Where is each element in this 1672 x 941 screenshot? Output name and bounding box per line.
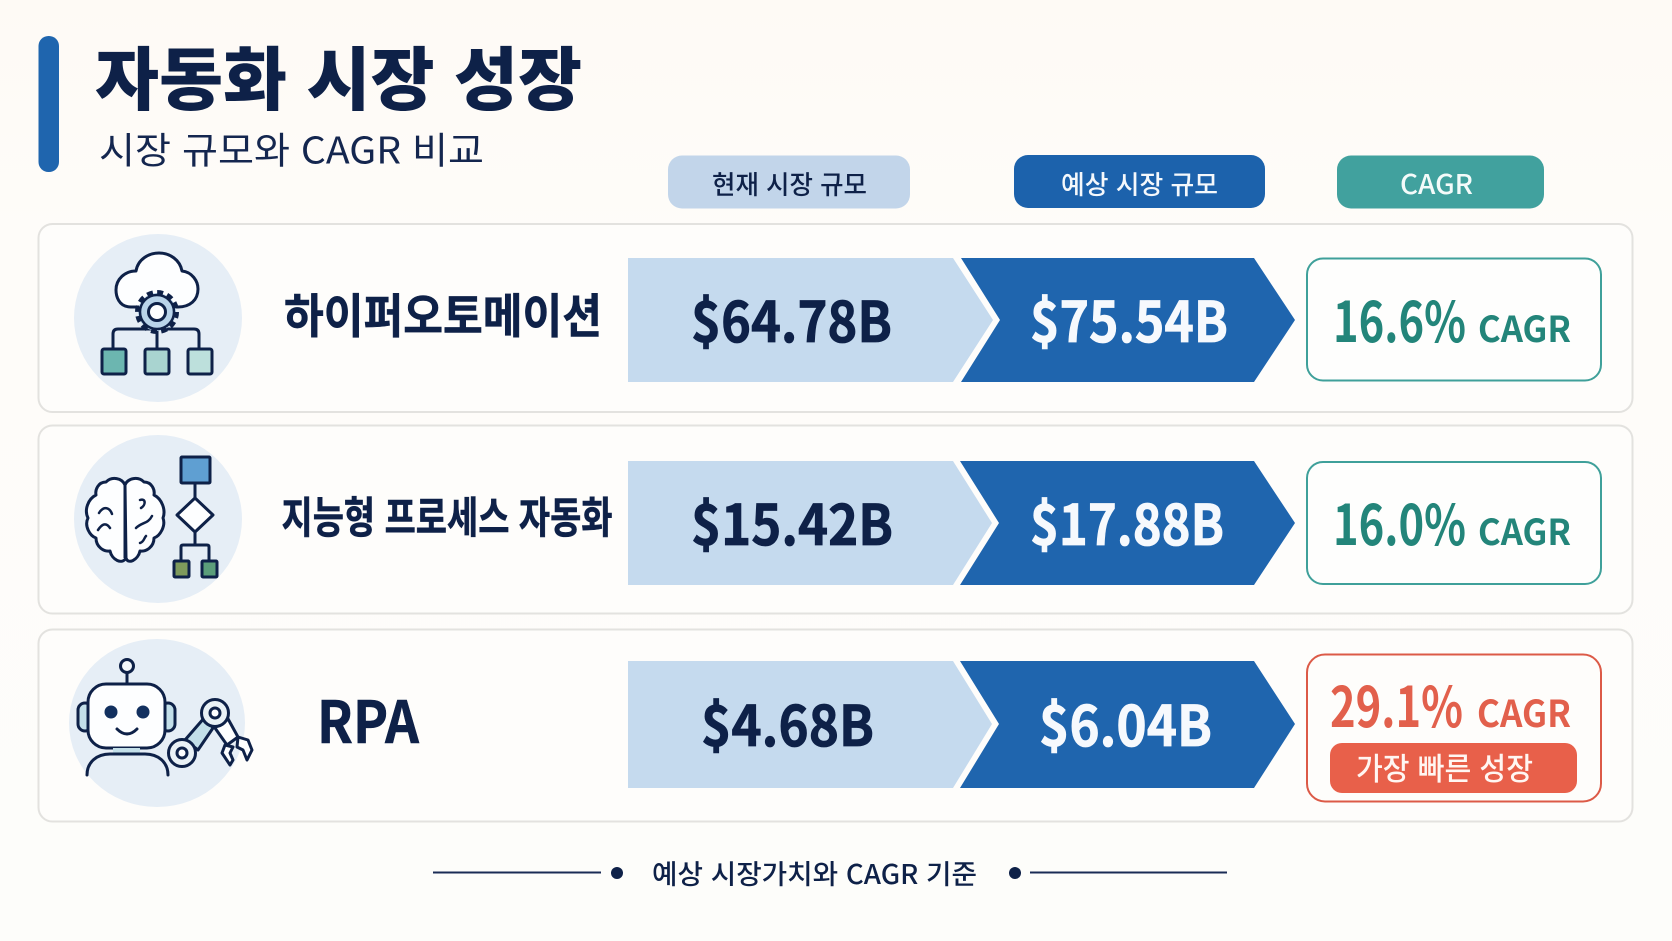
title accent bar	[38, 36, 59, 172]
column header: current market size	[668, 156, 910, 208]
current value arrow	[628, 661, 992, 788]
column header: CAGR: CAGR	[1400, 163, 1473, 202]
column header: projected market size: 예상 시장 규모	[1061, 165, 1218, 202]
current value arrow: $15.42B	[691, 481, 893, 562]
row label: 지능형 프로세스 자동화	[282, 484, 612, 546]
projected value arrow: $75.54B	[1030, 278, 1228, 359]
CAGR callout: CAGR	[1478, 301, 1571, 353]
footer note: 예상 시장가치와 CAGR 기준	[652, 853, 977, 892]
title: 자동화 시장 성장	[95, 24, 582, 124]
projected value arrow	[960, 661, 1295, 788]
CAGR callout: 16.6%	[1333, 278, 1466, 359]
current value arrow	[628, 258, 993, 382]
column header: projected market size	[1014, 155, 1265, 208]
icon: robot and arm	[69, 639, 252, 807]
CAGR callout: CAGR	[1478, 504, 1571, 556]
CAGR callout: fastest growth	[1307, 654, 1601, 802]
column header: current market size: 현재 시장 규모	[712, 165, 867, 202]
subtitle: 시장 규모와 CAGR 비교	[99, 120, 484, 174]
CAGR callout: fastest growth: 29.1%	[1330, 663, 1463, 744]
column header: CAGR	[1337, 156, 1544, 208]
CAGR callout	[1307, 258, 1601, 380]
current value arrow: $64.78B	[691, 278, 892, 359]
CAGR callout: 16.0%	[1333, 481, 1466, 562]
projected value arrow	[960, 461, 1295, 585]
CAGR callout	[1307, 462, 1601, 584]
row label: RPA	[317, 676, 420, 760]
projected value arrow: $6.04B	[1039, 682, 1212, 763]
icon: brain and flowchart	[74, 435, 242, 603]
projected value arrow	[961, 258, 1295, 382]
panel: hyperautomation row	[38, 224, 1632, 412]
CAGR callout: fastest growth: CAGR	[1477, 684, 1571, 738]
panel: intelligent process automation row	[38, 426, 1632, 614]
projected value arrow: $17.88B	[1030, 481, 1224, 562]
current value arrow	[628, 461, 992, 585]
footer note	[433, 853, 1227, 892]
badge: fastest growth	[1330, 743, 1577, 793]
icon: cloud gear workflow	[74, 234, 242, 402]
badge: fastest growth: 가장 빠른 성장	[1356, 744, 1533, 789]
row label: 하이퍼오토메이션	[284, 278, 602, 347]
current value arrow: $4.68B	[701, 682, 874, 763]
panel: RPA row	[38, 630, 1632, 822]
